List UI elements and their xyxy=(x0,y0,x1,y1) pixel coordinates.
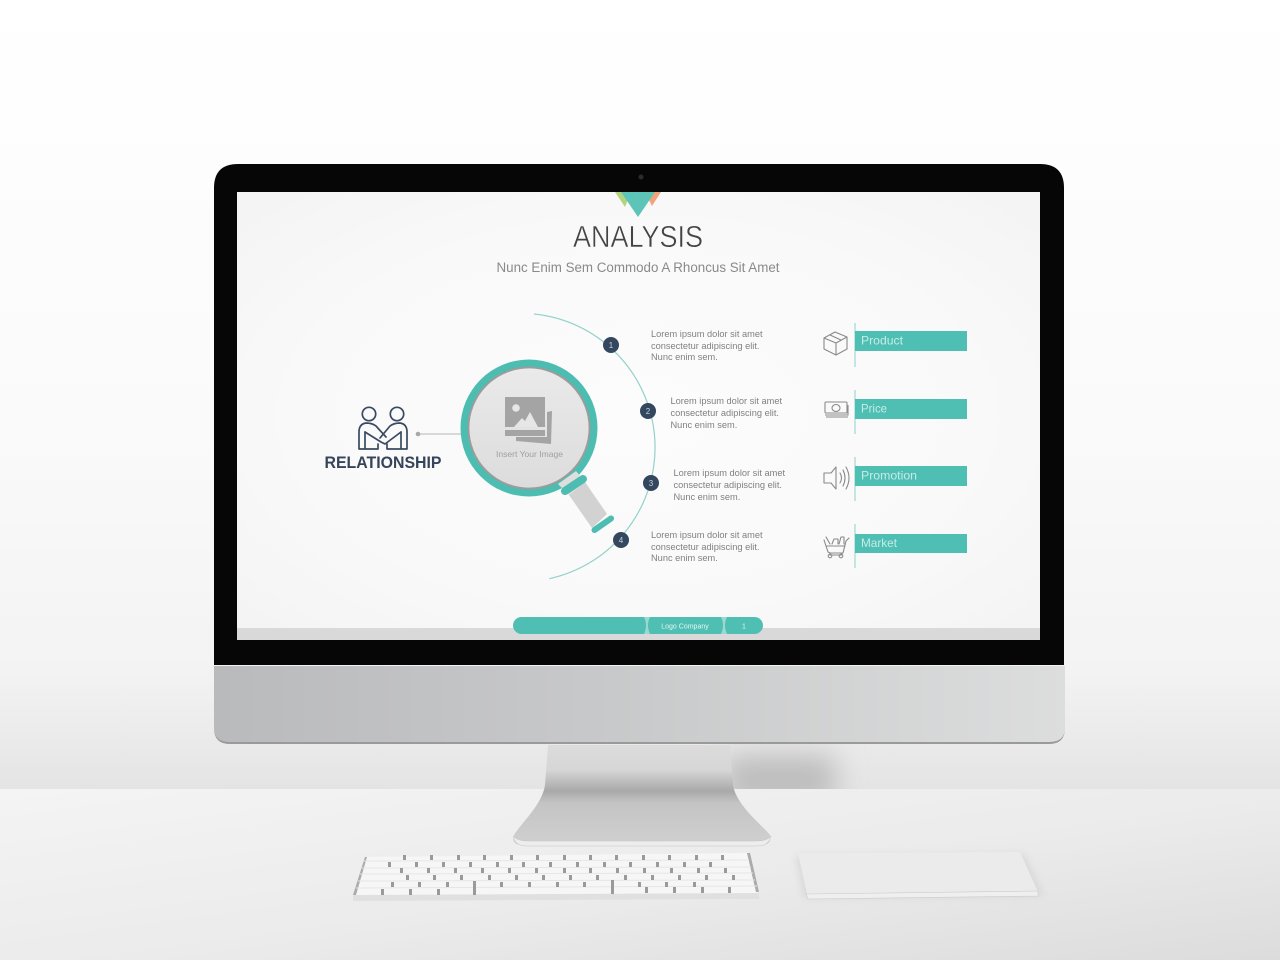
connector xyxy=(416,432,462,436)
keyboard side edges xyxy=(353,857,367,895)
logo triangles xyxy=(615,192,661,217)
badge 3: 3 xyxy=(649,479,654,488)
item: market xyxy=(824,524,967,568)
text 2: consectetur adipiscing elit. xyxy=(670,408,779,418)
arc xyxy=(534,314,655,579)
footer company: Logo Company xyxy=(661,624,709,630)
keyboard front edge xyxy=(353,893,759,901)
footer strip xyxy=(237,628,1040,640)
text 4: Nunc enim sem. xyxy=(651,553,718,563)
text 1: Nunc enim sem. xyxy=(651,352,718,362)
slide screen xyxy=(237,192,1040,640)
icon: speaker xyxy=(824,467,849,489)
bar: market xyxy=(855,534,967,553)
text 3 xyxy=(674,468,785,502)
handle collar bottom xyxy=(594,518,611,530)
keyboard xyxy=(353,853,759,901)
text 2: Lorem ipsum dolor sit amet xyxy=(670,396,782,406)
divider xyxy=(854,390,856,434)
bar: promotion xyxy=(855,466,967,486)
text 1: consectetur adipiscing elit. xyxy=(651,341,760,351)
item: product xyxy=(824,323,967,367)
icon: cart xyxy=(824,537,849,558)
trackpad xyxy=(796,852,1044,899)
icon: image placeholder xyxy=(505,397,552,444)
label: promotion: Promotion xyxy=(861,468,917,482)
point 2 xyxy=(640,396,782,430)
badge 4: 4 xyxy=(619,536,624,545)
icon: banknotes xyxy=(825,402,848,417)
text 3: Nunc enim sem. xyxy=(674,492,740,502)
badge 1 xyxy=(603,337,619,353)
item: price xyxy=(825,390,967,434)
icon: box xyxy=(824,332,847,355)
relationship group xyxy=(324,407,462,472)
trackpad edge xyxy=(806,891,1038,899)
magnifier xyxy=(460,360,611,530)
point 4 xyxy=(613,530,763,563)
label: product: Product xyxy=(861,334,904,348)
monitor stand xyxy=(513,745,770,845)
monitor xyxy=(214,164,1065,744)
webcam xyxy=(638,174,644,180)
key row lines xyxy=(356,860,757,888)
icon: handshake xyxy=(359,407,407,449)
text 4 xyxy=(651,530,763,563)
monitor bezel xyxy=(214,164,1064,665)
badge 4 xyxy=(613,532,629,548)
badge 2 xyxy=(640,403,656,419)
title: ANALYSIS xyxy=(573,219,703,254)
text 4: consectetur adipiscing elit. xyxy=(651,542,760,552)
point 1 xyxy=(603,329,763,362)
handle collar top xyxy=(565,479,583,491)
text 3: Lorem ipsum dolor sit amet xyxy=(674,468,785,478)
badge 1: 1 xyxy=(609,341,614,350)
label: market: Market xyxy=(861,536,898,550)
text 3: consectetur adipiscing elit. xyxy=(674,480,782,490)
item: promotion xyxy=(824,457,967,501)
text 1: Lorem ipsum dolor sit amet xyxy=(651,329,763,339)
trackpad top xyxy=(798,852,1038,894)
footer pill xyxy=(513,617,763,634)
ring xyxy=(460,360,598,496)
point 3 xyxy=(643,468,785,502)
divider xyxy=(854,457,856,501)
text 1 xyxy=(651,329,763,362)
label: relationship: RELATIONSHIP xyxy=(324,453,442,472)
label: price: Price xyxy=(861,402,887,416)
text 4: Lorem ipsum dolor sit amet xyxy=(651,530,763,540)
footer page number: 1 xyxy=(742,624,746,630)
text 2 xyxy=(670,396,782,430)
bar: price xyxy=(855,399,967,419)
background: table xyxy=(0,789,1280,960)
trackpad shadow xyxy=(796,854,1044,898)
placeholder label: Insert Your Image xyxy=(496,449,563,459)
subtitle: Nunc Enim Sem Commodo A Rhoncus Sit Amet xyxy=(496,260,780,275)
lens xyxy=(468,368,590,488)
badge 3 xyxy=(643,475,659,491)
handle xyxy=(558,471,607,528)
monitor shadow on wall xyxy=(725,755,835,805)
divider xyxy=(854,323,856,367)
badge 2: 2 xyxy=(646,407,651,416)
slide background xyxy=(237,192,1040,640)
stand base edge xyxy=(513,836,771,846)
text 2: Nunc enim sem. xyxy=(670,420,737,430)
monitor chin xyxy=(214,666,1065,744)
key gaps xyxy=(381,855,735,895)
divider xyxy=(854,524,856,568)
bar: product xyxy=(855,331,967,351)
keyboard body xyxy=(353,853,759,901)
